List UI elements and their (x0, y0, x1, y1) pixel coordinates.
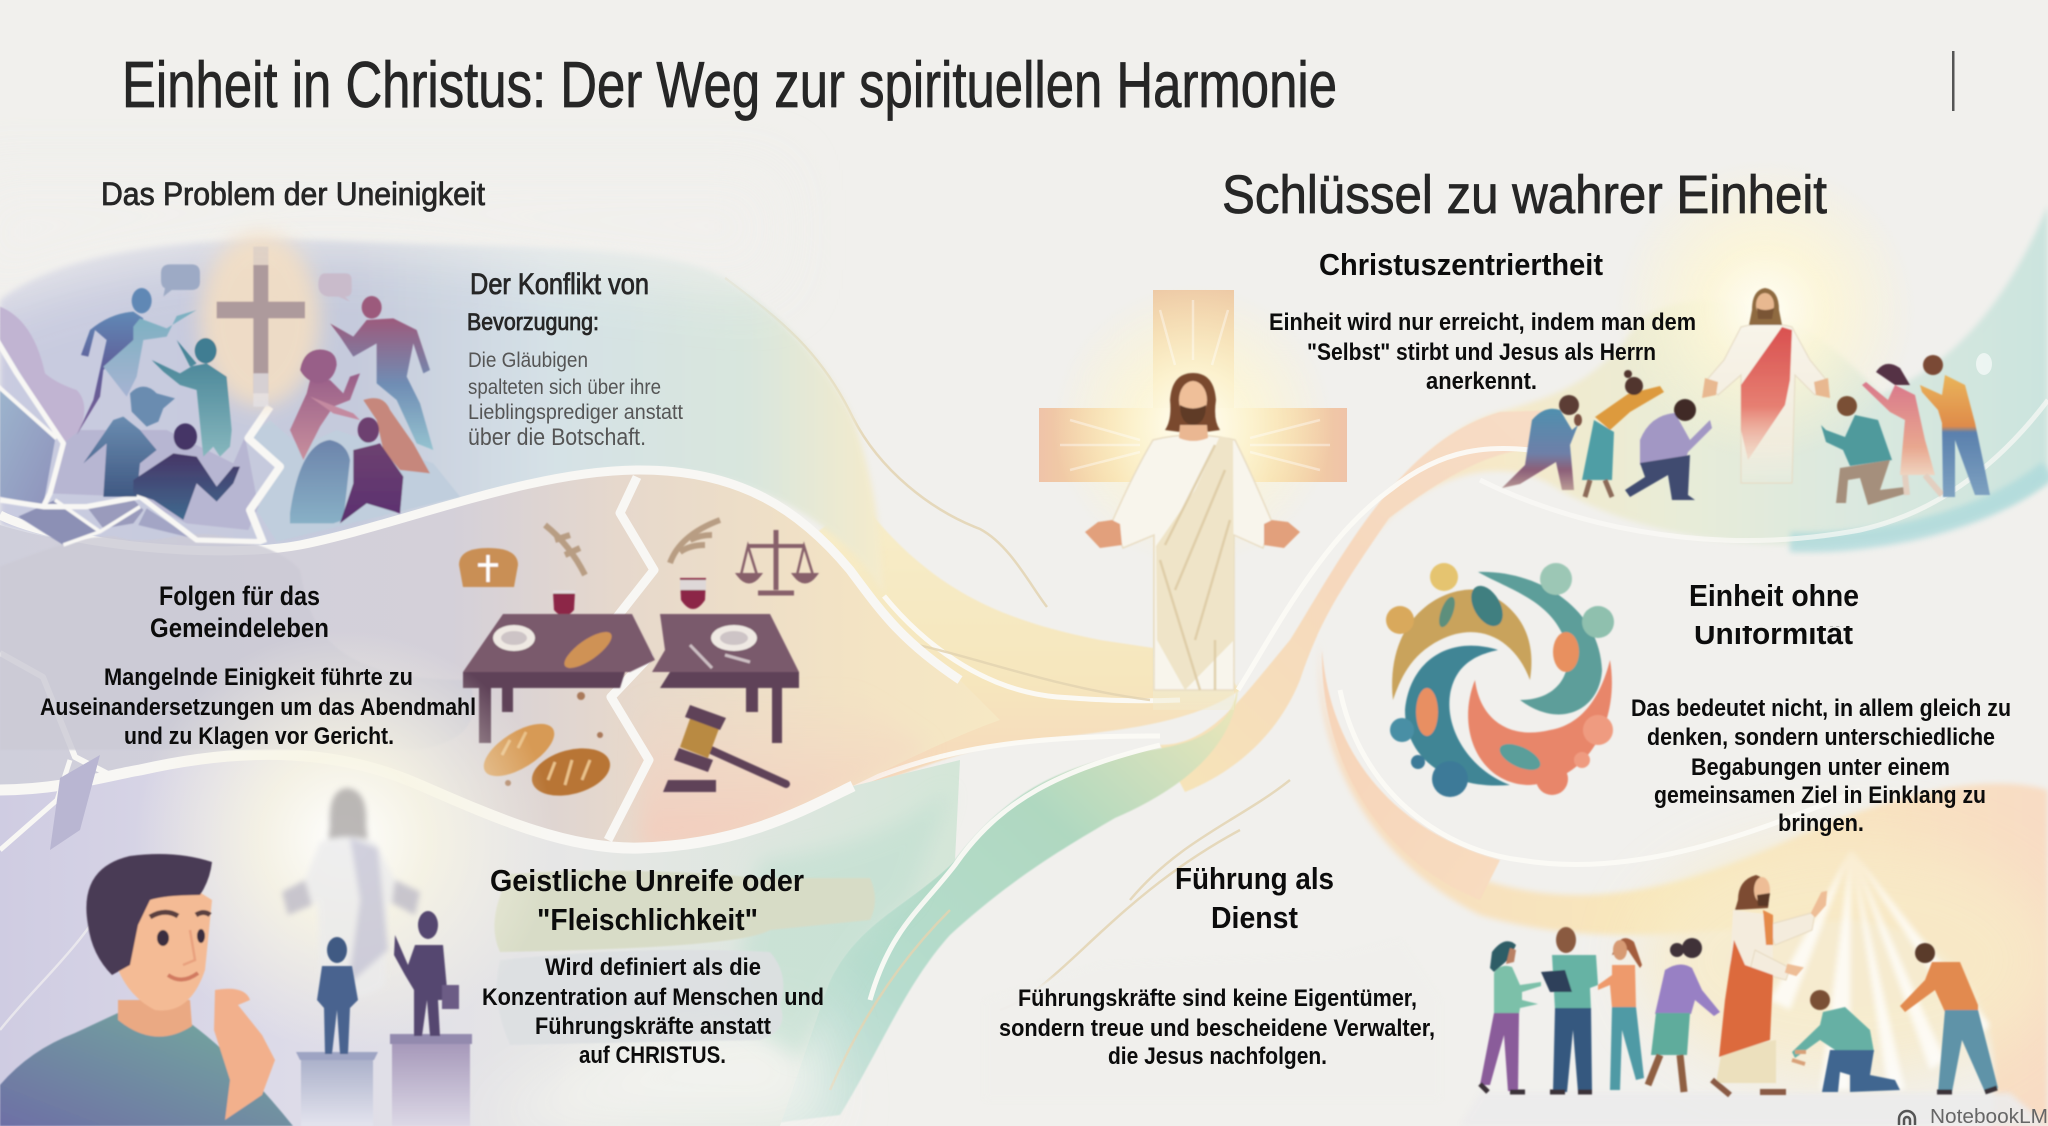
body text: sondern treue und bescheidene Verwalter, (999, 1015, 1435, 1042)
body text: Mangelnde Einigkeit führte zu (104, 664, 413, 691)
panel: Christuszentriertheit (1269, 247, 1696, 395)
figure: standing Jesus (1702, 288, 1830, 483)
figures: kneeling believers right (1821, 355, 1990, 505)
figure: leader on tall pedestal (390, 911, 472, 1126)
icon: unity swirl (1386, 563, 1614, 797)
body text: auf CHRISTUS. (579, 1042, 726, 1069)
body text: Auseinandersetzungen um das Abendmahl (40, 694, 476, 721)
body text: bringen. (1778, 810, 1864, 837)
body text: Führungskräfte anstatt (535, 1013, 771, 1040)
heading: Geistliche Unreife oder (490, 863, 804, 898)
illustration: arguing believers (0, 233, 460, 545)
body text (482, 954, 824, 1069)
body text (40, 664, 476, 750)
wave: top right teal to peach (1340, 205, 2048, 570)
glow: bottom right rays area (1640, 840, 2048, 1080)
body text: gemeinsamen Ziel in Einklang zu (1654, 782, 1986, 809)
icon: scales (739, 530, 815, 593)
figure: leader on short pedestal (296, 937, 378, 1126)
body text: Wird definiert als die (545, 954, 761, 981)
heading: Christuszentriertheit (1319, 247, 1603, 282)
heading: Gemeindeleben (150, 613, 329, 643)
background patches behind text (0, 534, 1440, 1100)
man teal (1821, 396, 1908, 505)
figures: left group (1480, 927, 1720, 1092)
panel: Geistliche Unreife (482, 863, 824, 1069)
cross (1039, 285, 1347, 710)
body text: "Selbst" stirbt und Jesus als Herrn (1307, 339, 1656, 366)
body text: denken, sondern unterschiedliche (1647, 724, 1995, 751)
floor (1460, 1093, 2048, 1126)
man clipboard (1541, 927, 1598, 1092)
woman teal (1480, 941, 1541, 1092)
body text: die Jesus nachfolgen. (1108, 1043, 1327, 1070)
icon: speech bubbles (161, 264, 352, 302)
white flow lines (853, 400, 2048, 1000)
figure: thinking man (0, 854, 293, 1126)
woman purple (1648, 938, 1720, 1092)
cracks (0, 340, 280, 545)
body text: anerkennt. (1426, 368, 1537, 395)
panel: Führung als Dienst (999, 861, 1435, 1070)
body text: Einheit wird nur erreicht, indem man dem (1269, 309, 1696, 336)
icon: table (463, 614, 799, 743)
body text (1269, 309, 1696, 395)
heading (150, 581, 329, 643)
figures: kneeling and helping (1792, 943, 1998, 1092)
subheading: Der Konflikt von Bevorzugung: Bevorzugung: (467, 309, 599, 336)
illustration: broken communion table (459, 520, 815, 804)
icon: gavel (663, 705, 786, 792)
body text: Das bedeutet nicht, in allem gleich zu (1631, 695, 2011, 722)
ribbon: cream centre (780, 500, 1240, 800)
heading: Das Problem der Uneinigkeit (101, 176, 485, 212)
body text: Führungskräfte sind keine Eigentümer, (1018, 985, 1417, 1012)
wave: teal lower rim (1790, 470, 2048, 542)
icon: loaves (476, 692, 615, 804)
heading: Schlüssel zu wahrer Einheit: Schlüssel zu wahrer Einheit (1222, 165, 1827, 225)
stones (50, 755, 100, 850)
background: flowing ribbons (725, 205, 2048, 1126)
figures: quarrelling right group (290, 296, 433, 523)
body text: Die Gläubigen: Die Gläubigen (468, 349, 588, 372)
figure: Jesus (1085, 373, 1300, 690)
heading: Einheit ohne (1689, 578, 1859, 613)
subheading: Der Konflikt von Bevorzugung (467, 268, 649, 336)
illustration: Jesus with kneeling believers (1502, 160, 1990, 505)
icon: wheat (545, 520, 720, 575)
illustration: central Jesus with cross (1039, 285, 1347, 710)
title: Einheit in Christus: Der Weg zur spirituellen Harmonie (122, 48, 1337, 121)
panel: Folgen für das Gemeindeleben (40, 581, 476, 750)
illustration: Jesus serving with leaders (1460, 850, 2048, 1126)
heading: "Fleischlichkeit" (537, 902, 758, 937)
figure: translucent Jesus (282, 788, 420, 998)
heading: Führung als (1175, 861, 1334, 896)
icon: wine glasses (553, 578, 706, 640)
title accent bar (1952, 51, 1954, 111)
woman orange (1582, 370, 1664, 497)
body text: Konzentration auf Menschen und (482, 984, 824, 1011)
body text (1631, 695, 2011, 837)
panel: Einheit ohne Uniformität (1631, 578, 2011, 837)
woman pink (1862, 364, 1942, 495)
panel: conflict background (0, 170, 884, 596)
panel: consequences background (0, 470, 1000, 848)
panel: Das Problem der Uneinigkeit (101, 176, 683, 451)
heading: Folgen für das (159, 581, 320, 611)
ribbon: peach up right (1160, 410, 1560, 792)
rays (1770, 850, 1990, 1090)
heading: Uniformität (1694, 616, 1853, 651)
heading (490, 863, 804, 937)
glow behind Jesus (134, 630, 554, 1050)
body text: Die Gläubigen (468, 349, 683, 451)
rocks (0, 307, 460, 545)
ribbon: green down left (750, 680, 1238, 1126)
heading (1175, 861, 1334, 935)
figure: Jesus (1712, 875, 1826, 1095)
icon: cross with glow (200, 233, 320, 407)
body text: Die Gläubigen: spalteten sich über ihre (468, 376, 661, 399)
heading (1690, 584, 1858, 644)
body text: Die Gläubigen: Lieblingsprediger anstatt (468, 401, 683, 424)
man blue (1502, 395, 1582, 490)
heading: Dienst (1211, 900, 1298, 935)
man orange (1920, 355, 1990, 497)
man purple (1625, 399, 1712, 500)
icon: bread with cross (459, 548, 518, 587)
body text: Die Gläubigen: über die Botschaft. (468, 424, 646, 451)
figures: quarrelling left group (77, 288, 240, 520)
subheading: Der Konflikt von Bevorzugung: Der Konflikt von (470, 268, 649, 301)
dividers: white cracks (0, 470, 960, 1030)
body text: und zu Klagen vor Gericht. (124, 723, 394, 750)
body text (999, 985, 1435, 1070)
body text: Begabungen unter einem (1691, 754, 1950, 781)
illustration: man thinking, Jesus and leaders (0, 630, 554, 1126)
ribbon: peach bottom right (1319, 640, 2048, 1126)
woman orange (1598, 938, 1644, 1090)
figures: kneeling believers left (1502, 370, 1712, 500)
panel: immaturity background (0, 754, 960, 1126)
